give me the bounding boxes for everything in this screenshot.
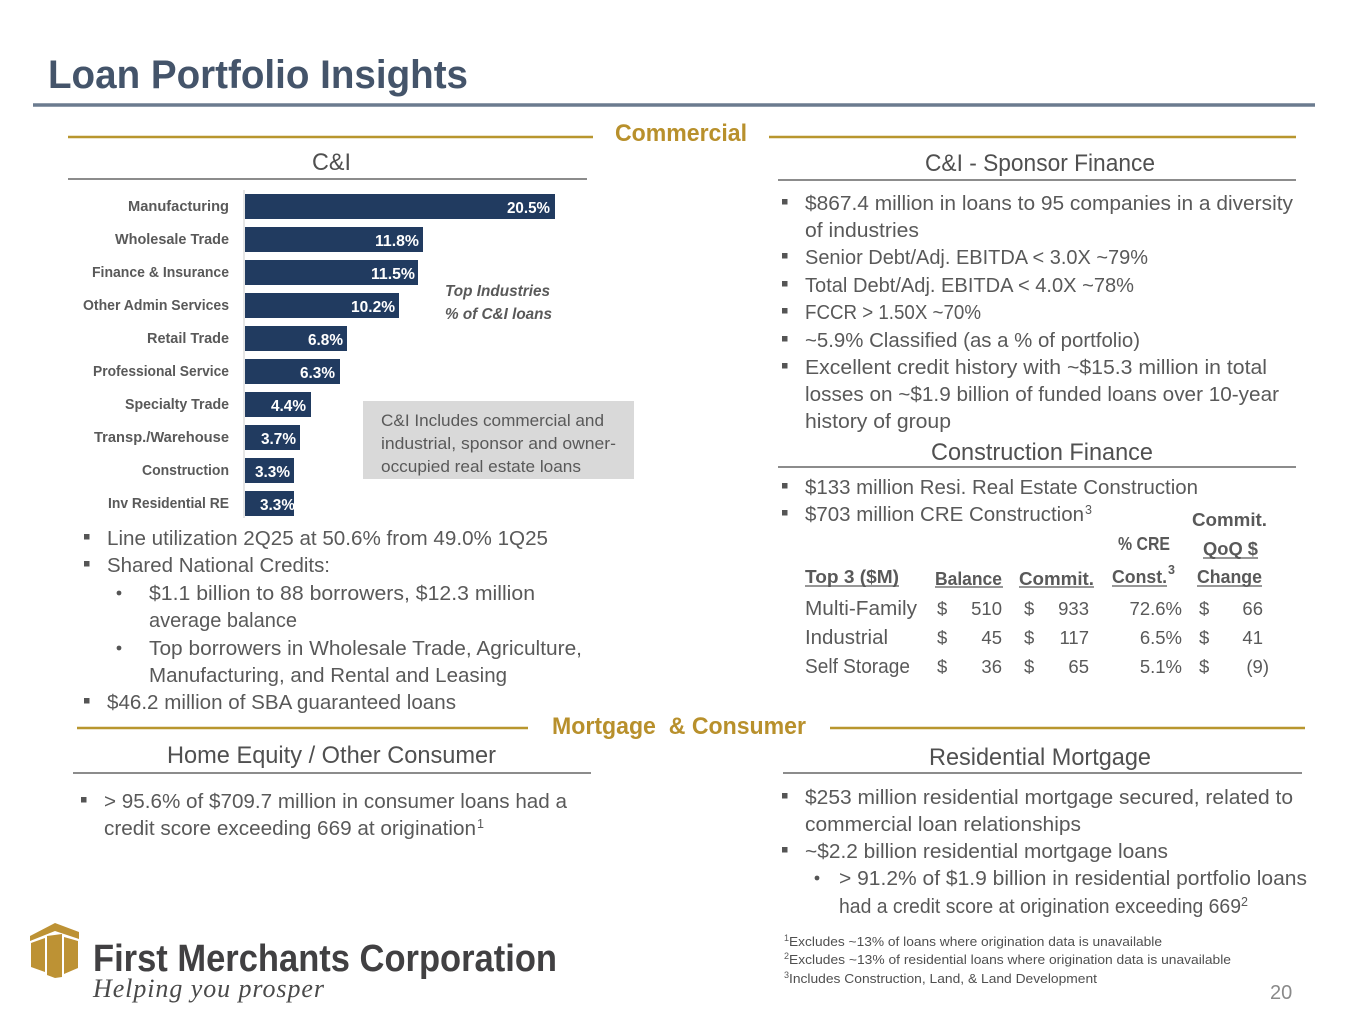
table: Top 3 CRE: Change bbox=[1197, 566, 1262, 587]
chart caption: Top Industries bbox=[445, 283, 550, 300]
panel: C&I Sponsor Finance bbox=[778, 150, 1296, 433]
table: Top 3 CRE: 510 bbox=[971, 598, 1002, 619]
icon: gold building box bbox=[30, 923, 79, 978]
table: Top 3 CRE: 66 bbox=[1242, 598, 1263, 619]
table: Top 3 CRE: 5.1% bbox=[1140, 656, 1182, 677]
footnotes: Includes Construction, Land, & Land Development bbox=[789, 971, 1097, 986]
bullet list: C&I: $1.1 billion to 88 borrowers, $12.3 million bbox=[149, 582, 535, 605]
bar: Professional Service: 6.3% bbox=[300, 365, 335, 382]
bullet list: Sponsor Finance: ~5.9% Classified (as a % of portfolio) bbox=[805, 329, 1140, 352]
bar: Other Admin Services: 10.2% bbox=[351, 299, 395, 316]
heading: Home Equity: Home Equity / Other Consumer bbox=[167, 742, 496, 769]
chart caption: % of C&I loans bbox=[445, 306, 552, 323]
table: Top 3 CRE: $ bbox=[937, 656, 947, 677]
bar: Inv Residential RE: Inv Residential RE bbox=[108, 496, 229, 512]
bullet list: Construction Finance bbox=[782, 476, 1198, 526]
table: Top 3 CRE: 6.5% bbox=[1140, 627, 1182, 648]
logo: First Merchants Corporation: First Merchants Corporation bbox=[93, 938, 557, 980]
heading: Construction Finance: Construction Finance bbox=[931, 439, 1153, 466]
table: Top 3 CRE: QoQ $ bbox=[1203, 538, 1259, 559]
table: Top 3 CRE: $ bbox=[1024, 598, 1034, 619]
table: Top 3 CRE: $ bbox=[1024, 627, 1034, 648]
table: Top 3 CRE: 933 bbox=[1058, 598, 1089, 619]
bullet list: Sponsor Finance: FCCR > 1.50X ~70% bbox=[805, 301, 981, 324]
table: Top 3 CRE: Const. bbox=[1112, 566, 1167, 587]
callout: C&I definition: occupied real estate loans bbox=[381, 458, 581, 476]
bar: Construction: 3.3% bbox=[255, 464, 290, 481]
panel: Construction Finance bbox=[778, 439, 1296, 678]
table: Top 3 CRE: 117 bbox=[1060, 627, 1089, 648]
bullet list: Residential Mortgage: 2 bbox=[1241, 895, 1248, 909]
bullet list: Sponsor Finance: Senior Debt/Adj. EBITDA < 3.0X ~79% bbox=[805, 246, 1148, 269]
bullet list: C&I: Shared National Credits: bbox=[107, 554, 330, 577]
callout: C&I definition bbox=[363, 401, 634, 479]
bullet list: Residential Mortgage bbox=[782, 786, 1307, 918]
bullet list: Construction Finance: $133 million Resi. Real Estate Construction bbox=[805, 476, 1198, 499]
bar: Transp./Warehouse: 3.7% bbox=[261, 431, 296, 448]
table: Top 3 CRE: Commit. bbox=[1019, 568, 1094, 589]
bar: Finance & Insurance bbox=[92, 260, 418, 285]
bar: Finance & Insurance: 11.5% bbox=[371, 266, 415, 283]
bar: Other Admin Services bbox=[83, 293, 399, 318]
bar: Retail Trade: 6.8% bbox=[308, 332, 343, 349]
table: Top 3 CRE: Multi-Family bbox=[805, 598, 917, 620]
table: Top 3 CRE: $ bbox=[1024, 656, 1034, 677]
callout: C&I definition: C&I Includes commercial and bbox=[381, 412, 604, 430]
table: Top 3 CRE: Industrial bbox=[805, 627, 888, 649]
bar: Wholesale Trade: 11.8% bbox=[375, 233, 419, 250]
heading: C&I: C&I bbox=[312, 149, 351, 176]
logo: First Merchants Corporation bbox=[30, 923, 557, 1003]
bullet list: Sponsor Finance: $867.4 million in loans to 95 companies in a diversity bbox=[805, 192, 1294, 215]
bullet list: Construction Finance: $703 million CRE Construction bbox=[805, 503, 1084, 526]
table: Top 3 CRE: $ bbox=[937, 598, 947, 619]
heading: Sponsor Finance: C&I - Sponsor Finance bbox=[925, 150, 1155, 177]
bar: Retail Trade: Retail Trade bbox=[147, 331, 229, 347]
footnotes: 1 bbox=[784, 933, 789, 943]
callout: C&I definition: industrial, sponsor and owner- bbox=[381, 435, 616, 453]
bullet list: C&I: Line utilization 2Q25 at 50.6% from 49.0% 1Q25 bbox=[107, 527, 548, 550]
bullet list: Sponsor Finance: losses on ~$1.9 billion of funded loans over 10-year bbox=[805, 383, 1279, 406]
bar: Construction: Construction bbox=[142, 463, 229, 479]
table: Top 3 CRE: 3 bbox=[1168, 563, 1175, 577]
bar: Manufacturing bbox=[128, 194, 555, 219]
footnotes: Excludes ~13% of loans where origination data is unavailable bbox=[789, 934, 1162, 949]
bar: Finance & Insurance: Finance & Insurance bbox=[92, 265, 229, 281]
bullet list: Sponsor Finance: of industries bbox=[805, 219, 919, 242]
bullet list: Construction Finance: 3 bbox=[1085, 503, 1092, 517]
bullet list: Residential Mortgage: commercial loan relationships bbox=[805, 813, 1081, 836]
bullet list: Sponsor Finance: history of group bbox=[805, 410, 951, 433]
bar: Specialty Trade bbox=[125, 392, 311, 417]
table: Top 3 CRE: Balance bbox=[935, 568, 1002, 589]
bullet list: Sponsor Finance: Total Debt/Adj. EBITDA < 4.0X ~78% bbox=[805, 274, 1134, 297]
bar: Other Admin Services: Other Admin Services bbox=[83, 298, 229, 314]
bar: Manufacturing: 20.5% bbox=[507, 200, 550, 217]
bar: Professional Service bbox=[93, 359, 340, 384]
table: Top 3 CRE: (9) bbox=[1246, 656, 1269, 677]
table: Top 3 CRE: Self Storage bbox=[805, 656, 910, 678]
bullet list: C&I: $46.2 million of SBA guaranteed loans bbox=[107, 691, 456, 714]
bar: Transp./Warehouse: Transp./Warehouse bbox=[94, 430, 229, 446]
bullet list: Residential Mortgage: $253 million residential mortgage secured, related to bbox=[805, 786, 1293, 809]
footnotes: Excludes ~13% of residential loans where origination data is unavailable bbox=[789, 952, 1231, 967]
table: Top 3 CRE: $ bbox=[937, 627, 947, 648]
bullet list: C&I: Top borrowers in Wholesale Trade, Agriculture, bbox=[149, 637, 582, 660]
bar: Transp./Warehouse bbox=[94, 425, 300, 450]
bullet list: Home Equity bbox=[81, 790, 568, 840]
bar: Manufacturing: Manufacturing bbox=[128, 199, 229, 215]
table: Top 3 CRE: $ bbox=[1199, 656, 1209, 677]
section header: Commercial: Commercial bbox=[615, 120, 747, 147]
table: Top 3 CRE: % CRE bbox=[1118, 533, 1170, 554]
bar: Construction bbox=[142, 458, 294, 483]
table: Top 3 CRE bbox=[805, 509, 1269, 678]
section header: Mortgage & Consumer: Mortgage & Consumer bbox=[552, 713, 806, 740]
page number: 20 bbox=[1270, 982, 1292, 1004]
bullet list: C&I bbox=[84, 527, 582, 714]
title: Loan Portfolio Insights bbox=[48, 53, 468, 97]
chart caption bbox=[445, 283, 552, 323]
heading: Residential Mortgage: Residential Mortgage bbox=[929, 744, 1151, 771]
table: Top 3 CRE: 36 bbox=[981, 656, 1002, 677]
bullet list: C&I: average balance bbox=[149, 609, 297, 632]
bullet list: C&I: Manufacturing, and Rental and Leasing bbox=[149, 664, 507, 687]
table: Top 3 CRE: Commit. bbox=[1192, 509, 1267, 530]
table: Top 3 CRE: Top 3 ($M) bbox=[805, 566, 899, 587]
panel: C&I bbox=[68, 149, 634, 714]
bullet list: Home Equity: > 95.6% of $709.7 million in consumer loans had a bbox=[104, 790, 568, 813]
table: Top 3 CRE: 65 bbox=[1068, 656, 1089, 677]
bar: Wholesale Trade: Wholesale Trade bbox=[115, 232, 229, 248]
footnotes: 3 bbox=[784, 970, 789, 980]
bullet list: Residential Mortgage: ~$2.2 billion residential mortgage loans bbox=[805, 840, 1168, 863]
bar: Specialty Trade: 4.4% bbox=[271, 398, 306, 415]
table: Top 3 CRE: 72.6% bbox=[1130, 598, 1182, 619]
bar: Inv Residential RE: 3.3% bbox=[260, 497, 295, 514]
bar: Inv Residential RE bbox=[108, 491, 295, 516]
table: Top 3 CRE: $ bbox=[1199, 598, 1209, 619]
bar chart: top industries bbox=[83, 190, 555, 518]
bar: Professional Service: Professional Service bbox=[93, 364, 229, 380]
logo: First Merchants Corporation: Helping you prosper bbox=[92, 974, 325, 1003]
bullet list: Home Equity: 1 bbox=[477, 817, 484, 831]
bar: Specialty Trade: Specialty Trade bbox=[125, 397, 229, 413]
panel: Home Equity / Other Consumer bbox=[73, 742, 591, 840]
table: Top 3 CRE: $ bbox=[1199, 627, 1209, 648]
bullet list: Residential Mortgage: > 91.2% of $1.9 billion in residential portfolio loans bbox=[839, 867, 1307, 890]
table: Top 3 CRE: 41 bbox=[1242, 627, 1263, 648]
bullet list: Residential Mortgage: had a credit score at origination exceeding 669 bbox=[839, 895, 1241, 918]
panel: Residential Mortgage bbox=[782, 744, 1307, 918]
footnotes bbox=[784, 933, 1231, 986]
bullet list: Sponsor Finance bbox=[782, 192, 1294, 433]
bullet list: Home Equity: credit score exceeding 669 at origination bbox=[104, 817, 476, 840]
bullet list: Sponsor Finance: Excellent credit history with ~$15.3 million in total bbox=[805, 356, 1267, 379]
footnotes: 2 bbox=[784, 951, 789, 961]
bar: Wholesale Trade bbox=[115, 227, 423, 252]
bar: Retail Trade bbox=[147, 326, 347, 351]
table: Top 3 CRE: 45 bbox=[981, 627, 1002, 648]
